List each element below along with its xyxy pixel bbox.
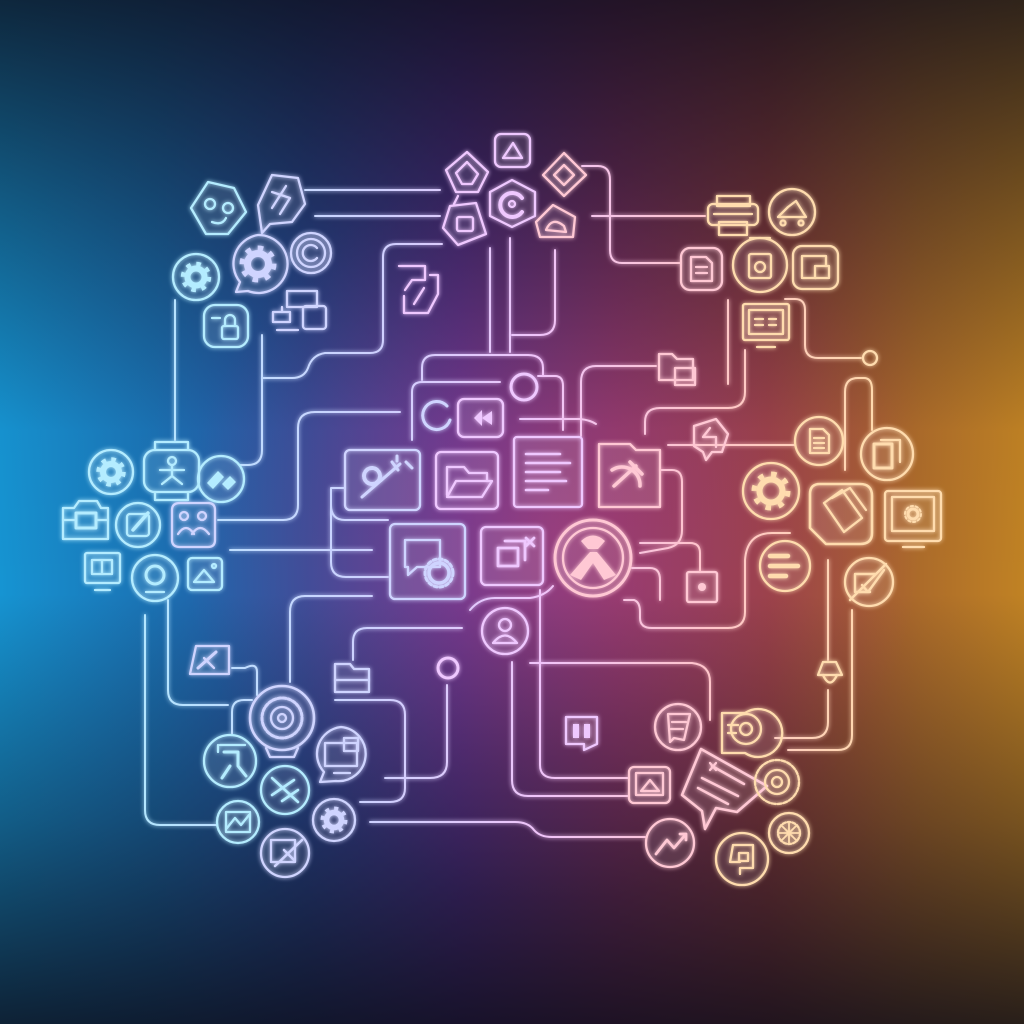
icon: gear speech bubble — [233, 235, 288, 293]
icon: small folder — [335, 664, 369, 692]
icon: check circle — [845, 558, 893, 606]
icon: lamp node — [818, 662, 842, 682]
icon: speech square right — [694, 419, 728, 460]
icon: pills circle — [198, 456, 244, 502]
icon: graph circle right — [646, 819, 694, 867]
icon: folder panel — [436, 452, 498, 509]
icon: list circle — [760, 541, 810, 591]
icon: lens circle — [132, 555, 178, 601]
icon: document panel — [514, 437, 582, 507]
icon: syringe circle — [261, 829, 309, 877]
icon: person circle — [482, 608, 528, 654]
icon: circle camera — [733, 238, 787, 292]
icon: gear circle lower — [313, 799, 355, 841]
icon: monitor speech — [317, 727, 366, 782]
icon: circle copyright — [291, 233, 331, 273]
icon: monitor top right — [743, 304, 789, 347]
icon: graph circle left — [217, 801, 259, 843]
icon: speech hexagon — [258, 175, 305, 233]
icon: center chat — [399, 266, 438, 313]
icon: refresh circle — [423, 402, 450, 430]
icon: gear circle right — [743, 463, 799, 519]
icon: left picture — [188, 558, 222, 590]
icon: left monitor — [85, 553, 120, 590]
icon: crossed tools circle — [261, 766, 309, 814]
icon: hexagon cluster face — [191, 182, 246, 234]
icon: pen circle — [116, 503, 160, 547]
node circle lower — [438, 658, 458, 678]
icon: circle cart — [769, 189, 815, 235]
icon: folders — [659, 354, 695, 385]
icon: faces square — [172, 503, 215, 547]
icon: picture box — [629, 767, 670, 803]
icon: watch — [144, 442, 199, 500]
icon: top pentagon — [446, 152, 488, 192]
icon: square footprint — [566, 717, 597, 750]
icon: figure circle — [204, 735, 256, 787]
connector lines — [145, 166, 872, 837]
icon: gear circle top left — [173, 254, 219, 300]
icon: tag square — [443, 196, 486, 245]
icon: monitor gear panel — [390, 524, 465, 599]
node circle right — [863, 351, 877, 365]
icon: big gear speech — [250, 686, 314, 757]
icon: rounded papers — [810, 484, 872, 544]
icon: camera — [63, 501, 108, 539]
icon: small square node — [687, 572, 717, 602]
icon: folder tool — [599, 444, 660, 507]
icon: network boxes — [273, 291, 326, 330]
icon: document box — [681, 248, 722, 290]
icon: copy circle — [861, 428, 913, 480]
icon: top square — [495, 134, 530, 167]
icon: magnifier circle — [722, 709, 782, 757]
icon: monitor right — [885, 491, 941, 547]
icon: large central circle — [555, 520, 631, 596]
icon: scroll circle — [716, 833, 768, 885]
icon: wheel circle — [769, 813, 809, 853]
icon: pen box — [190, 646, 229, 674]
icon: sun gear circle — [755, 760, 799, 804]
icon: document circle — [655, 704, 701, 750]
icon: wand panel — [345, 450, 420, 510]
icon: square window — [793, 246, 838, 289]
icon: printer — [708, 196, 758, 235]
icon: hexagon badge — [536, 205, 575, 237]
icon: left gear circle — [89, 450, 133, 494]
icon: big document speech — [682, 749, 767, 829]
icon: doc circle right — [795, 417, 843, 465]
node circle center — [511, 374, 537, 400]
icon: center hexagon circle — [490, 180, 535, 227]
icon: square cross — [481, 527, 543, 585]
network diagram — [63, 134, 941, 885]
icon: rounded lock — [204, 305, 248, 347]
icon: square arrows — [458, 399, 503, 437]
icon: top diamond — [543, 153, 586, 196]
